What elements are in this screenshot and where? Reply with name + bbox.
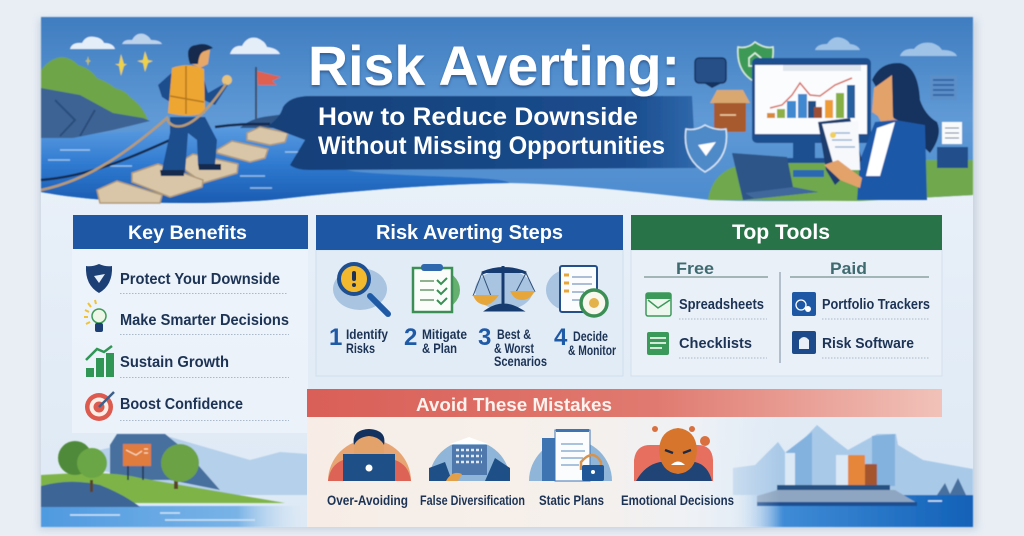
heading: mistakes: Avoid These Mistakes bbox=[416, 395, 612, 415]
benefit list: Boost Confidence bbox=[120, 396, 243, 413]
water bbox=[41, 127, 510, 203]
heading: mistakes bbox=[307, 389, 942, 417]
banner illustration bbox=[41, 17, 973, 203]
icon: woman with clipboard bbox=[818, 63, 939, 200]
icon: clipboard bbox=[413, 264, 460, 312]
icon: risk software bbox=[792, 331, 816, 354]
black safety line bbox=[41, 124, 270, 180]
mistake labels bbox=[327, 492, 734, 508]
step labels: & Plan bbox=[422, 340, 457, 356]
subtitle: How to Reduce Downside bbox=[318, 103, 638, 131]
mistake labels: False Diversification bbox=[420, 492, 525, 508]
icon: flag bbox=[240, 67, 300, 129]
column: free: Checklists bbox=[679, 335, 752, 352]
icon: person walking with life vest bbox=[158, 44, 232, 176]
banner sky bbox=[41, 17, 973, 203]
step labels: Identify bbox=[346, 326, 388, 342]
heading: top tools: Top Tools bbox=[732, 221, 830, 244]
icon: growth bars bbox=[86, 346, 114, 377]
heading: steps: Risk Averting Steps bbox=[376, 222, 563, 244]
title: Risk Averting: bbox=[308, 34, 680, 97]
icon: magnifier bbox=[333, 264, 388, 314]
benefit list: Make Smarter Decisions bbox=[120, 312, 289, 329]
step labels: & Monitor bbox=[568, 342, 616, 358]
step labels bbox=[329, 324, 616, 369]
icon: side documents bbox=[930, 75, 968, 168]
step labels: Risks bbox=[346, 340, 375, 356]
column: paid: Paid bbox=[830, 259, 867, 278]
step labels: & Worst bbox=[494, 340, 534, 356]
icon: false diversification bbox=[429, 437, 510, 481]
icon: sparkles bbox=[85, 51, 153, 76]
mistake labels: Over-Avoiding bbox=[327, 492, 408, 508]
icon: target bbox=[85, 392, 114, 421]
benefit list: Protect Your Downside bbox=[120, 271, 280, 288]
panel: key benefits bbox=[72, 215, 308, 433]
icon: green shield bbox=[738, 42, 773, 82]
step labels: 1 bbox=[329, 324, 342, 351]
column: free bbox=[644, 259, 768, 358]
icon: clouds right bbox=[815, 37, 957, 56]
panel: risk averting steps bbox=[316, 215, 623, 376]
mistake labels: Static Plans bbox=[539, 492, 604, 508]
column: free: Free bbox=[676, 259, 714, 278]
icon: stepping stones bbox=[97, 127, 288, 203]
panel: top tools bbox=[631, 215, 942, 376]
icon: blue shield bbox=[685, 125, 727, 172]
step labels: Decide bbox=[573, 328, 608, 344]
icon: brown box bbox=[710, 90, 750, 132]
navy ribbon bbox=[268, 96, 696, 170]
subtitle bbox=[318, 103, 665, 160]
icon: left trees bbox=[58, 441, 107, 492]
panel: avoid these mistakes bbox=[307, 389, 942, 527]
title bbox=[308, 34, 680, 160]
column: free: Spreadsheets bbox=[679, 296, 764, 313]
icon: over-avoiding bbox=[328, 429, 411, 481]
icon: spreadsheet mail bbox=[646, 293, 671, 316]
mistake labels: Emotional Decisions bbox=[621, 492, 734, 508]
icon: right tree bbox=[161, 444, 199, 489]
icon: ship bbox=[757, 485, 917, 506]
icon: report with seal bbox=[546, 266, 607, 316]
heading: top tools bbox=[631, 215, 942, 250]
heading: steps bbox=[316, 215, 623, 250]
icon: shield bbox=[86, 264, 112, 293]
column: paid: Risk Software bbox=[822, 335, 914, 352]
icon: lightbulb bbox=[84, 300, 106, 332]
icon: tracker bbox=[792, 292, 816, 316]
column: paid bbox=[790, 259, 930, 358]
icon: ground bbox=[708, 160, 973, 201]
icon: orange towers bbox=[848, 455, 877, 486]
step labels: Best & bbox=[497, 326, 531, 342]
step labels: Scenarios bbox=[494, 353, 547, 369]
icon: presentation board bbox=[123, 444, 151, 480]
bottom left landscape bbox=[41, 434, 308, 527]
benefit list bbox=[120, 271, 289, 420]
icon: monitor with chart bbox=[752, 58, 871, 163]
step labels: 3 bbox=[478, 324, 491, 351]
icon: scales bbox=[473, 266, 535, 310]
rope bbox=[41, 84, 226, 190]
icon: clouds left bbox=[70, 34, 280, 54]
heading: key benefits: Key Benefits bbox=[128, 223, 247, 244]
subtitle: Without Missing Opportunities bbox=[318, 132, 665, 160]
icon: static plans bbox=[529, 429, 612, 481]
icon: laptop bbox=[732, 153, 818, 200]
bottom right harbor bbox=[730, 425, 973, 527]
column: paid: Portfolio Trackers bbox=[822, 296, 930, 313]
icon: checklist bbox=[647, 332, 669, 355]
step labels: 4 bbox=[554, 324, 568, 351]
heading: key benefits bbox=[73, 215, 308, 249]
benefit list: Sustain Growth bbox=[120, 354, 229, 371]
icon: green hill and rock bbox=[41, 57, 150, 138]
icon: emotional decisions bbox=[634, 426, 713, 481]
step labels: Mitigate bbox=[422, 326, 467, 342]
icon: data tablet bbox=[695, 58, 726, 88]
step labels: 2 bbox=[404, 324, 417, 351]
